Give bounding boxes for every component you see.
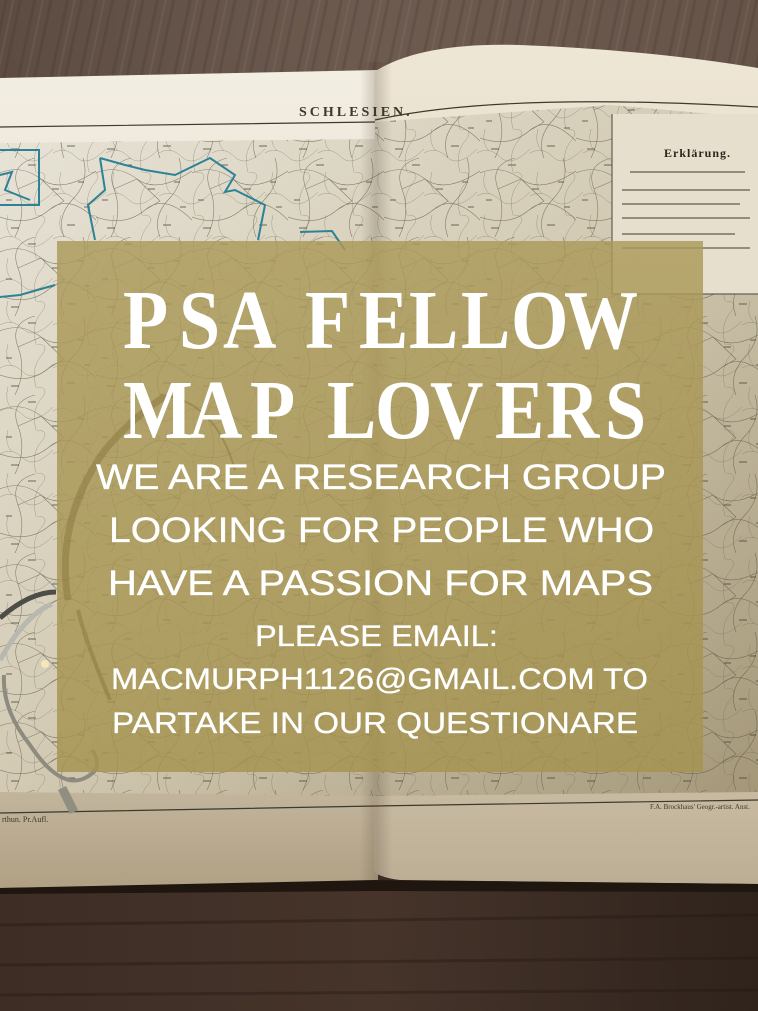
map publisher credit: F.A. Brockhaus' Geogr.-artist. Anst. <box>650 803 750 811</box>
title: PSA FELLOW <box>123 274 638 367</box>
intro text: HAVE A PASSION FOR MAPS <box>108 564 653 603</box>
gutter shadow <box>360 62 392 887</box>
contact text: PLEASE EMAIL: <box>255 620 498 653</box>
right page <box>374 45 758 884</box>
blue borders <box>0 150 345 297</box>
intro text <box>96 458 666 603</box>
map printed area <box>0 105 758 796</box>
map print note: rthun. Pr.Aufl. <box>2 815 48 824</box>
legend heading on book: Erklärung. <box>664 146 731 160</box>
intro text: LOOKING FOR PEOPLE WHO <box>109 511 654 550</box>
glasses seen through the panel <box>65 395 235 700</box>
map heading on book: SCHLESIEN. <box>299 105 413 120</box>
title: MAP LOVERS <box>123 364 646 457</box>
contact text: MACMURPH1126@GMAIL.COM TO <box>111 663 648 696</box>
title <box>123 274 646 457</box>
contact text <box>111 620 648 740</box>
contact text: PARTAKE IN OUR QUESTIONARE <box>112 707 638 740</box>
intro text: WE ARE A RESEARCH GROUP <box>96 458 666 497</box>
eyeglasses <box>0 592 97 812</box>
left page <box>0 70 378 888</box>
map frame lines <box>0 102 758 813</box>
legend box <box>612 114 758 294</box>
book bottom edge <box>0 880 758 894</box>
translucent olive panel <box>57 241 703 772</box>
